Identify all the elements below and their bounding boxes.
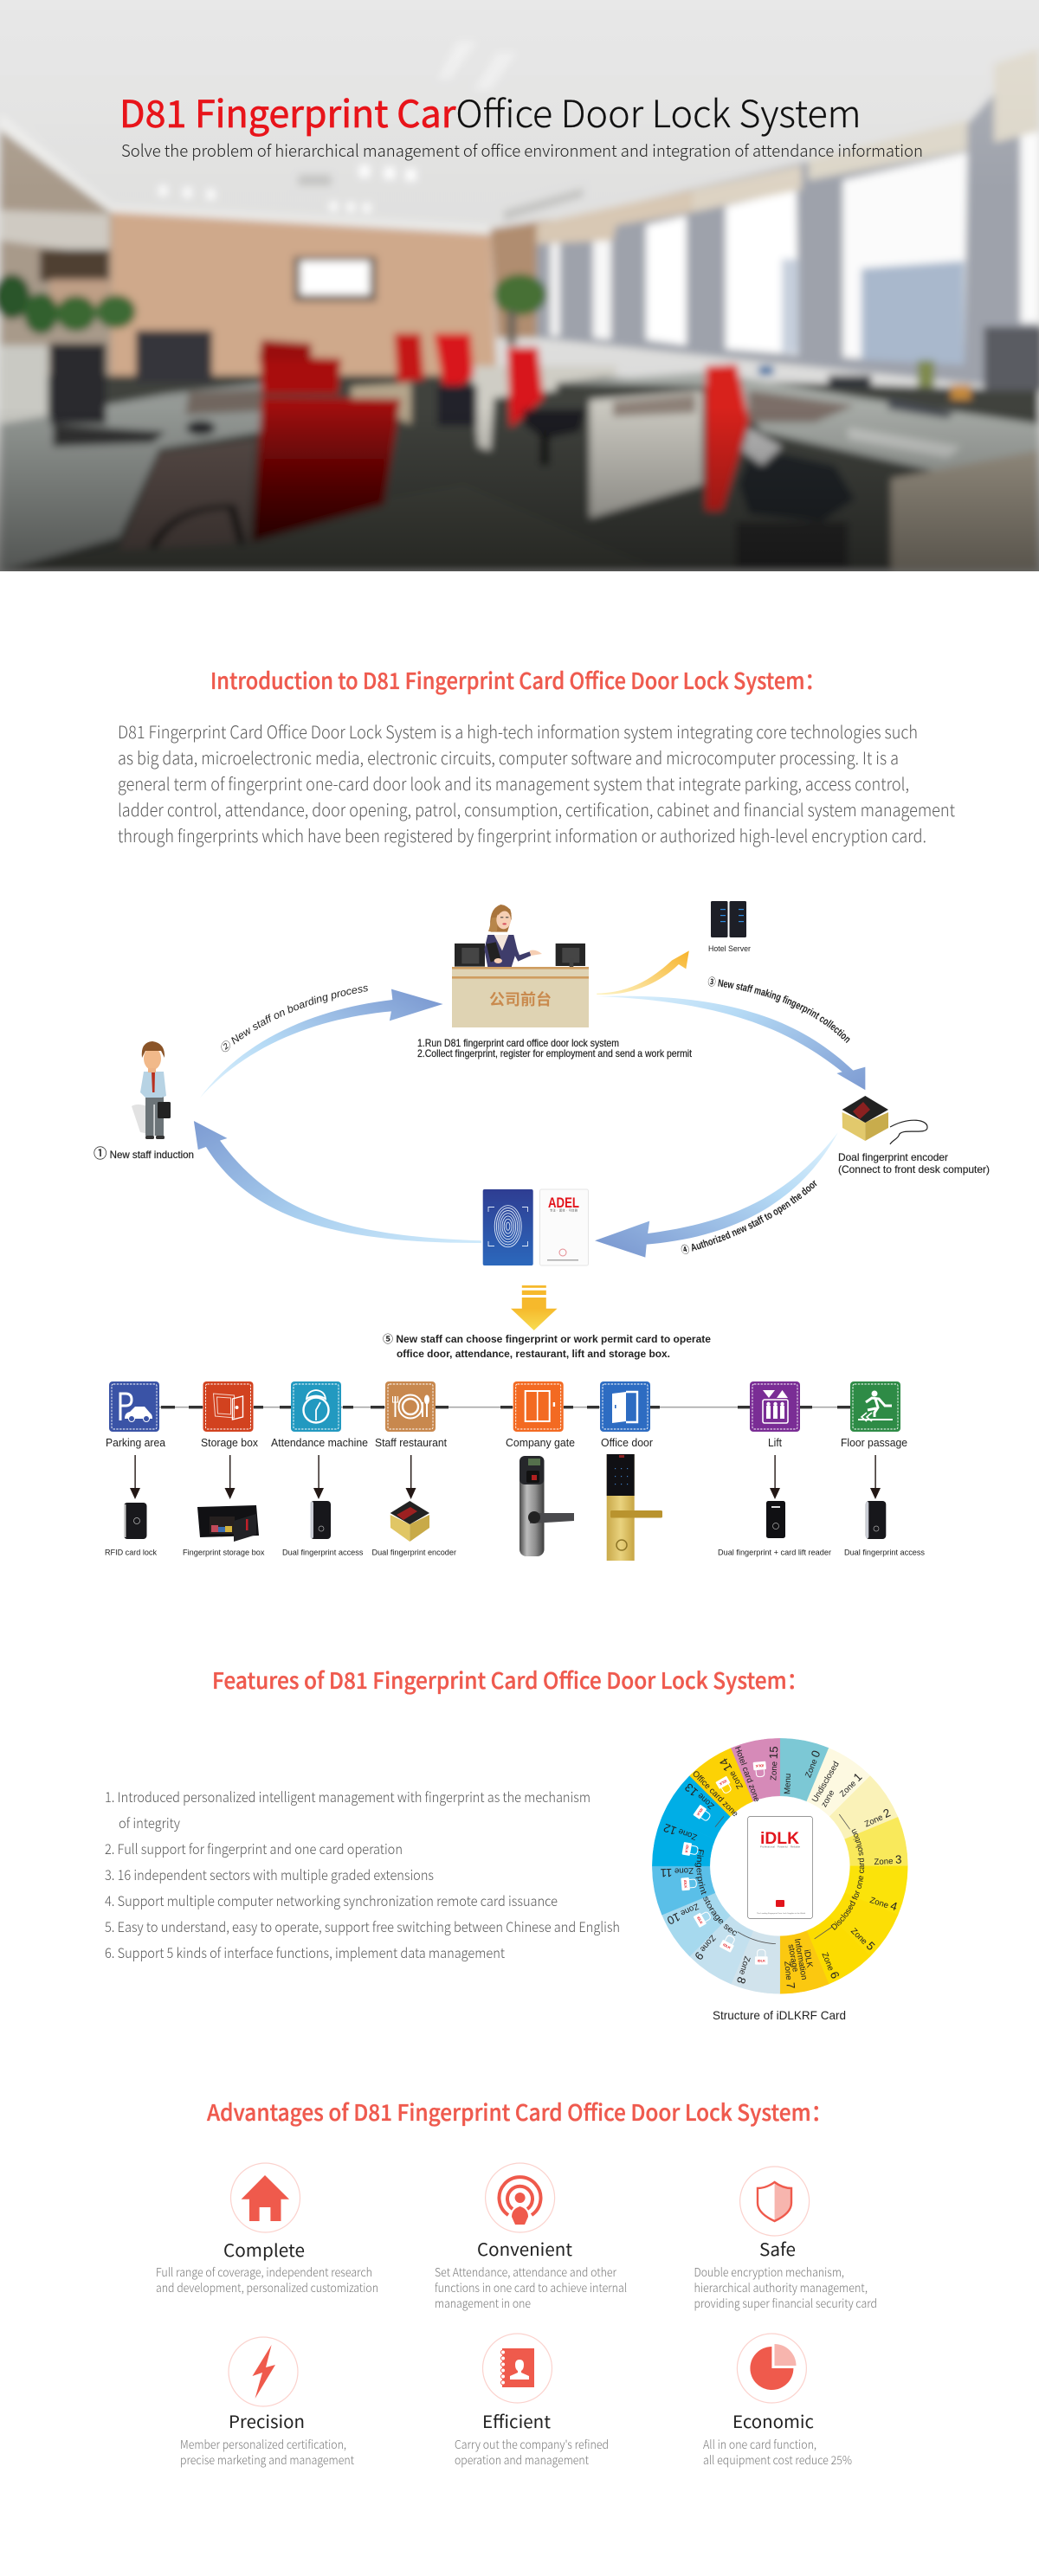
device captions: RFID card lock (105, 1548, 157, 1558)
icon: white ADEL card: 专注 · 团体 · 可信赖 (550, 1208, 578, 1212)
down arrows (130, 1455, 881, 1499)
item: safe: hierarchical authority management, (694, 2278, 868, 2296)
device captions (105, 1548, 925, 1558)
device: office door lock (607, 1454, 662, 1561)
figure: receptionist (455, 905, 585, 967)
sector labels: Zone 9 (692, 1933, 720, 1962)
ring caption: Structure of iDLKRF Card (713, 2008, 846, 2022)
step 5 description: ⑤ New staff can choose fingerprint or work permit card to operate (383, 1333, 711, 1345)
icon: attendance clock (291, 1381, 341, 1432)
row labels: Floor passage (841, 1436, 907, 1449)
label: encoder: (Connect to front desk computer) (838, 1163, 990, 1175)
heading: advantages: Advantages of D81 Fingerprint Card Office Door Lock System： (207, 2096, 832, 2128)
sector labels: Information (792, 1938, 809, 1980)
item: convenient (435, 2163, 627, 2311)
device: fingerprint encoder (842, 1096, 927, 1144)
sector labels: Zone 12 (661, 1821, 699, 1845)
icon: white ADEL card (540, 1189, 589, 1265)
sector labels: Zone 8 (734, 1955, 755, 1986)
sector labels: Zone 0 (800, 1748, 823, 1779)
label: step 2: ② New staff on boarding process (222, 985, 368, 1053)
lock markers: iDLK (684, 1845, 690, 1853)
heading: features: Features of D81 Fingerprint Card Office Door Lock System： (212, 1664, 808, 1696)
features list: 1. Introduced personalized intelligent management with fingerprint as the mechanism (105, 1786, 590, 1806)
lock markers: iDLK (696, 1916, 704, 1925)
sector labels: iDLK (802, 1949, 814, 1969)
features list: 4. Support multiple computer networking synchronization remote card issuance (105, 1890, 558, 1910)
sector labels: Zone 14 (717, 1755, 745, 1792)
hero title: D81 Fingerprint CarOffice Door Lock System (119, 85, 861, 138)
arrow: yellow down (511, 1285, 558, 1330)
center iDLK card: The Leading Fingerprint Door Lock Supplier in the World (757, 1912, 806, 1915)
introduction paragraph (118, 718, 955, 847)
sector labels: Zone 11 (660, 1865, 694, 1879)
sector labels: Zone 15 (765, 1746, 780, 1781)
sector labels: storage (786, 1943, 800, 1973)
icon: storage box (203, 1381, 253, 1432)
label: hotel server: Hotel Server (708, 944, 751, 954)
row labels: Lift (768, 1436, 782, 1449)
sector labels: Zone 2 (862, 1806, 893, 1829)
panel: access points row (105, 1381, 925, 1561)
sector labels: Zone 13 (682, 1781, 716, 1813)
label: encoder (838, 1151, 990, 1175)
lock markers: iDLK (722, 1942, 732, 1950)
device: dual access reader (310, 1501, 331, 1539)
introduction paragraph: ladder control, attendance, door opening, patrol, consumption, certification, cabinet and financial system management (118, 796, 955, 821)
label: step 3: ③ New staff making fingerprint collection (708, 976, 850, 1043)
item: convenient: Set Attendance, attendance and other (435, 2263, 616, 2280)
device captions: Dual fingerprint access (282, 1548, 364, 1558)
device: encoder (390, 1501, 429, 1542)
icon: white ADEL card: ADEL (548, 1195, 579, 1211)
features list (105, 1786, 620, 1962)
item: complete: Full range of coverage, independent research (156, 2263, 372, 2280)
center iDLK card (748, 1816, 812, 1918)
lock markers: iDLK (755, 1763, 764, 1768)
item: safe (694, 2167, 877, 2311)
item: convenient: Convenient (477, 2236, 572, 2261)
item: efficient: operation and management (455, 2450, 589, 2468)
device captions: Dual fingerprint encoder (372, 1548, 456, 1558)
floor and desks (0, 376, 1039, 571)
connector lines (159, 1407, 900, 1408)
device captions: Fingerprint storage box (183, 1548, 265, 1558)
panel: onboarding cycle diagram (94, 901, 990, 1360)
icon: lift (750, 1381, 800, 1432)
label: encoder: Doal fingerprint encoder (838, 1151, 948, 1163)
sector labels: Zone 4 (868, 1892, 900, 1914)
front desk: 公司前台 (489, 988, 552, 1010)
item: complete (156, 2163, 378, 2296)
icon: parking (109, 1381, 159, 1432)
icon: company gate (513, 1381, 564, 1432)
hero subtitle: Solve the problem of hierarchical management of office environment and integration of attendance information (121, 138, 923, 162)
icon: hotel server (711, 901, 746, 937)
icon: restaurant (385, 1381, 436, 1432)
arrow: front desk to hotel server (597, 950, 689, 995)
features list: 2. Full support for fingerprint and one card operation (105, 1838, 403, 1858)
item: complete: Complete (223, 2237, 305, 2262)
arrow: front desk to encoder (598, 996, 865, 1090)
features list: 3. 16 independent sectors with multiple graded extensions (105, 1864, 434, 1884)
step 5 description: office door, attendance, restaurant, lift and storage box. (397, 1348, 670, 1360)
item: safe: providing super financial security card (694, 2294, 877, 2311)
introduction paragraph: D81 Fingerprint Card Office Door Lock System is a high-tech information system integrating core technologies such (118, 718, 918, 744)
item: safe: Safe (759, 2236, 796, 2261)
lock markers: iDLK (683, 1880, 688, 1889)
row labels: Attendance machine (271, 1436, 368, 1449)
front desk (452, 967, 589, 1027)
introduction paragraph: general term of fingerprint one-card door look and its management system that integrate parking, access control, (118, 770, 909, 795)
item: precision: Precision (229, 2408, 305, 2433)
ceiling lights (159, 42, 517, 212)
row labels: Parking area (106, 1436, 166, 1449)
center iDLK card: iDLK (760, 1830, 799, 1848)
front desk task list (417, 1037, 693, 1059)
figure: new staff (132, 1041, 171, 1139)
item: economic: All in one card function, (703, 2435, 816, 2452)
sector labels: Zone 3 (874, 1852, 902, 1867)
lock markers: iDLK (696, 1807, 704, 1817)
item: efficient (455, 2334, 609, 2468)
heading: introduction: Introduction to D81 Fingerprint Card Office Door Lock System： (210, 664, 825, 696)
sector labels: Zone 6 (820, 1950, 842, 1980)
sector labels: Menu (783, 1774, 793, 1794)
sector labels: Zone 10 (665, 1901, 701, 1928)
label: step 4: ④ Authorized new staff to open the door (681, 1181, 817, 1254)
icon: floor passage (850, 1381, 900, 1432)
row labels: Company gate (506, 1436, 575, 1449)
introduction paragraph: through fingerprints which have been registered by fingerprint information or authorized high-level encryption card. (118, 822, 926, 847)
chart: iDLK RF card sector ring (652, 1738, 908, 1994)
lock markers (681, 1761, 768, 1965)
device: lift reader (766, 1501, 785, 1538)
arrow: cards back to new staff (194, 1121, 481, 1243)
row labels: Office door (601, 1436, 654, 1449)
sector labels (660, 1745, 902, 1989)
step 5 description (383, 1333, 711, 1360)
device: floor reader (866, 1501, 886, 1539)
item: economic (703, 2334, 852, 2468)
features list: of integrity (119, 1812, 180, 1832)
device: company gate lock (520, 1456, 574, 1556)
sector labels: Fingerprint storage sector (694, 1849, 737, 1935)
center iDLK card: Professional · Powerful · Reliable (760, 1845, 801, 1849)
item: precision: Member personalized certification, (180, 2435, 346, 2452)
sector labels: Zone 5 (849, 1924, 877, 1953)
sector labels: zone (819, 1788, 836, 1809)
label: step 1: ① New staff induction (94, 1146, 194, 1162)
lock markers: iDLK (758, 1958, 765, 1962)
panel: advantages grid (156, 2163, 877, 2468)
sector labels: Zone 1 (836, 1770, 864, 1799)
sector labels: Disclosed for one card solution (831, 1828, 864, 1930)
foreground desk (259, 498, 379, 533)
front desk task list: 2.Collect fingerprint, register for employment and send a work permit (417, 1047, 693, 1059)
item: safe: Double encryption mechanism, (694, 2263, 844, 2280)
item: precision (180, 2337, 354, 2468)
item: economic: all equipment cost reduce 25% (703, 2450, 852, 2468)
item: efficient: Carry out the company's refined (455, 2435, 609, 2452)
chair bases (437, 385, 477, 426)
item: complete: and development, personalized customization (156, 2278, 378, 2296)
icon: office door (600, 1381, 650, 1432)
features list: 5. Easy to understand, easy to operate, support free switching between Chinese and English (105, 1916, 620, 1936)
device: storage safe (197, 1505, 259, 1542)
item: economic: Economic (732, 2408, 814, 2433)
plants (0, 274, 30, 319)
item: efficient: Efficient (482, 2408, 551, 2433)
row labels: Staff restaurant (375, 1436, 447, 1449)
sector labels: Office card zone (690, 1769, 739, 1819)
item: convenient: functions in one card to achieve internal (435, 2278, 627, 2296)
sector labels: Undisclosed (810, 1760, 842, 1804)
introduction paragraph: as big data, microelectronic media, electronic circuits, computer software and microcomputer processing. It is a (118, 744, 899, 770)
icon: blue fingerprint card (483, 1189, 533, 1265)
device captions: Dual fingerprint access (844, 1548, 925, 1558)
arrow: encoder to cards (595, 1132, 838, 1258)
features list: 6. Support 5 kinds of interface functions, implement data management (105, 1942, 505, 1962)
lock markers: iDLK (719, 1779, 727, 1787)
hero office photo (0, 0, 1039, 582)
sector labels: Hotel card zone (732, 1745, 761, 1803)
device: RFID lock (124, 1503, 147, 1539)
red chairs (252, 397, 401, 543)
ring sectors (643, 1729, 917, 2003)
arrow: new staff to front desk (200, 989, 443, 1098)
sector labels: Zone 7 (782, 1961, 797, 1989)
item: convenient: management in one (435, 2294, 531, 2311)
device captions: Dual fingerprint + card lift reader (718, 1548, 831, 1558)
row labels (106, 1436, 907, 1449)
row labels: Storage box (201, 1436, 258, 1449)
front desk task list: 1.Run D81 fingerprint card office door lock system (417, 1037, 619, 1049)
item: precision: precise marketing and management (180, 2450, 354, 2468)
